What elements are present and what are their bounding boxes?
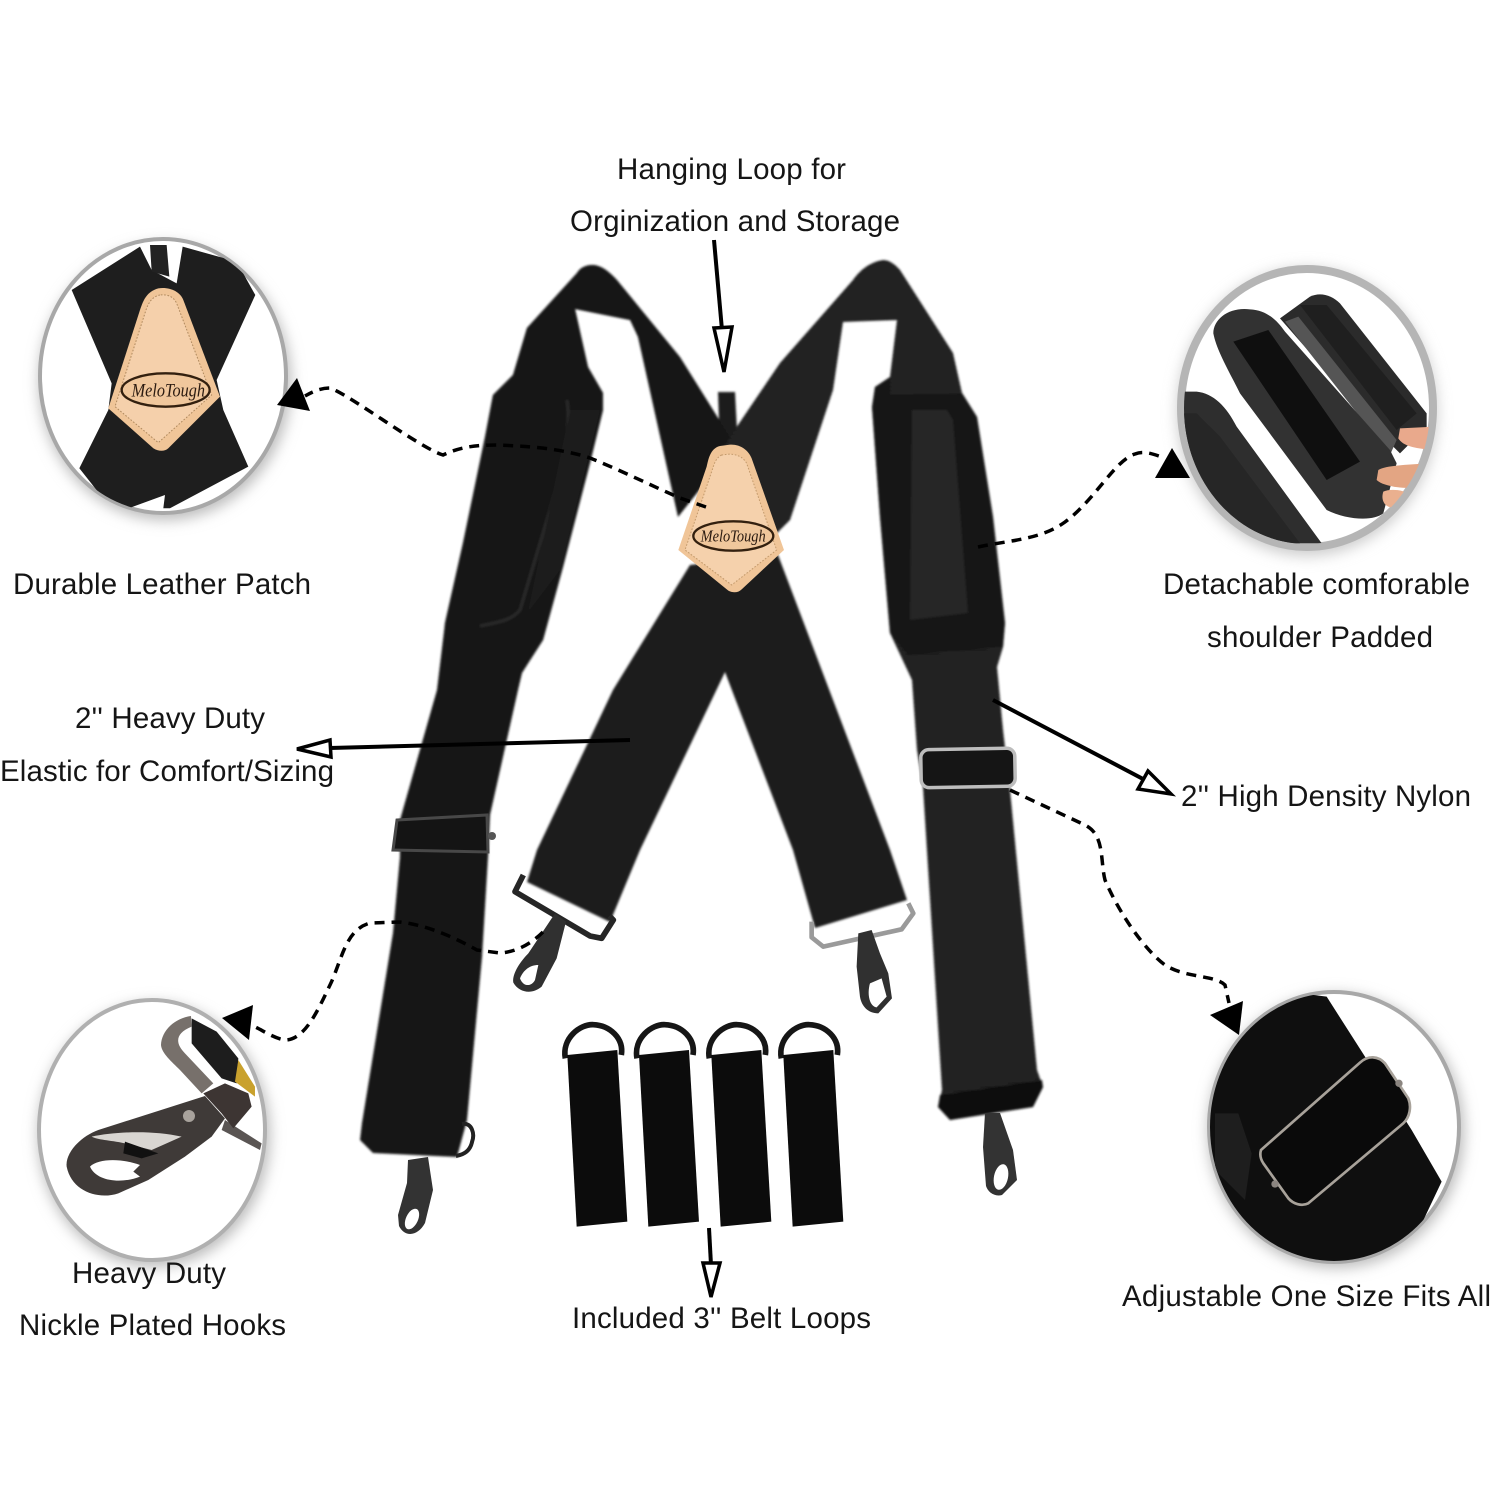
suspenders: main product	[360, 260, 1043, 1157]
callout circle: shoulder pad	[1170, 268, 1437, 556]
label: hooks: Heavy Duty	[72, 1257, 226, 1290]
label: hanging loop	[570, 153, 900, 238]
label: shoulder pad: shoulder Padded	[1207, 621, 1433, 654]
label: elastic	[0, 702, 334, 788]
callout circle: leather patch: MeloTough	[131, 381, 205, 402]
label: shoulder pad: Detachable comforable	[1163, 568, 1470, 601]
label: elastic: 2'' Heavy Duty	[75, 702, 265, 735]
leather patch: MeloTough	[700, 527, 766, 546]
right rear strap with shoulder pad	[722, 260, 1043, 1120]
right slider buckle	[921, 748, 1015, 788]
dashed arrow: leather patch	[277, 378, 706, 507]
right strap end tab	[938, 1080, 1043, 1120]
right elastic leg	[690, 540, 907, 928]
left slider buckle	[393, 815, 496, 852]
left elastic leg	[527, 555, 778, 922]
belt loop 3	[709, 1025, 771, 1227]
arrow: hanging loop	[714, 240, 732, 372]
label: belt loops: Included 3'' Belt Loops	[572, 1302, 871, 1335]
belt loop 4	[781, 1025, 843, 1227]
left leg ring and hook	[513, 875, 613, 992]
label: nylon: 2'' High Density Nylon	[1181, 780, 1471, 813]
left strap end ring and hook	[398, 1124, 473, 1234]
belt loop 1	[565, 1025, 627, 1227]
dashed arrow: shoulder pad	[978, 448, 1190, 547]
label: hanging loop: Hanging Loop for	[617, 153, 846, 186]
dashed arrow: hooks	[222, 922, 543, 1040]
right strap end hook	[983, 1113, 1017, 1195]
left rear strap with shoulder pad	[360, 265, 735, 1157]
belt loop 2	[637, 1025, 699, 1227]
arrow: high density nylon	[993, 700, 1171, 794]
label: hanging loop: Orginization and Storage	[570, 205, 900, 238]
dashed arrow: adjustable buckle	[1010, 790, 1243, 1035]
leather patch	[678, 445, 784, 592]
label: hooks	[19, 1257, 286, 1342]
label: leather patch: Durable Leather Patch	[13, 568, 311, 601]
label: shoulder pad	[1163, 568, 1470, 654]
callout circle: adjustable buckle	[1195, 980, 1464, 1280]
callout circle: leather patch	[39, 239, 291, 520]
label: hooks: Nickle Plated Hooks	[19, 1309, 286, 1342]
arrow: elastic	[297, 740, 630, 757]
arrow: belt loops	[703, 1228, 720, 1297]
label: elastic: Elastic for Comfort/Sizing	[0, 755, 334, 788]
left pad inner seam	[480, 400, 568, 626]
right shoulder pad	[872, 377, 1005, 655]
callout circle: nickel plated hook	[38, 1000, 270, 1267]
left shoulder pad	[443, 265, 630, 660]
label: adjustable: Adjustable One Size Fits All	[1122, 1280, 1491, 1313]
belt loops	[565, 1025, 843, 1227]
right leg ring and hook	[812, 903, 913, 1013]
right pad velcro panel	[910, 410, 968, 620]
hanging loop	[718, 392, 738, 450]
